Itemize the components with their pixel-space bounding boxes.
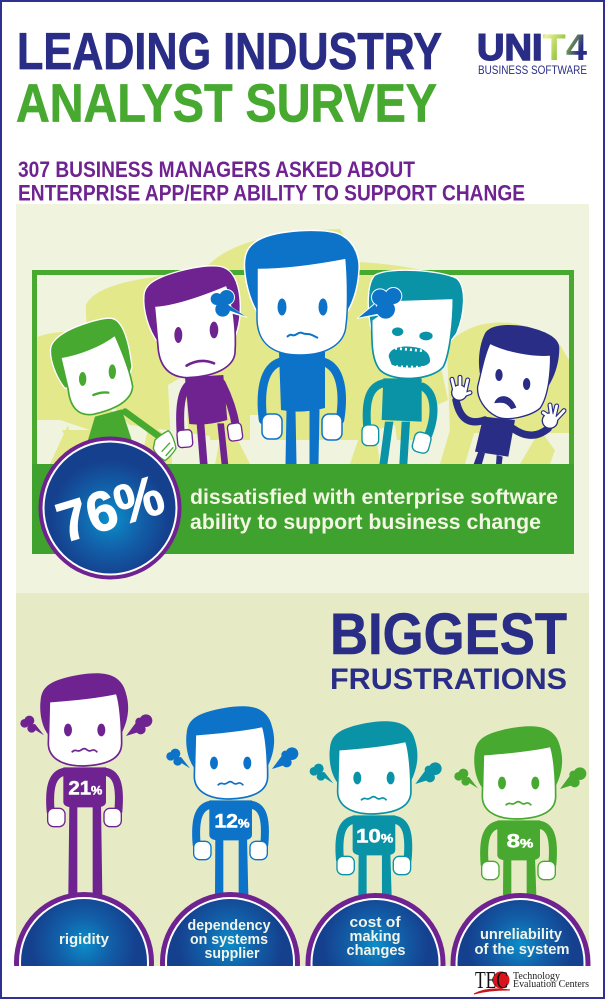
icon: anger puff (210, 289, 248, 318)
logo: Technology Evaluation Centers: TEC (475, 968, 508, 994)
icon: clawed hand left (451, 377, 470, 401)
background crowd silhouettes (37, 229, 569, 464)
dome: dependency (160, 892, 300, 966)
icon: steam right (272, 747, 298, 769)
character: purple (144, 266, 248, 465)
character: rigidity 21% (20, 673, 152, 895)
subtitle (18, 157, 525, 206)
icon: anger puff (356, 287, 402, 320)
dome: unreliability (450, 893, 590, 966)
logo: Unit4: UNIT4 (477, 27, 587, 68)
subtitle: 307 BUSINESS MANAGERS ASKED ABOUT (18, 157, 415, 182)
dome labels: of the system (474, 941, 570, 958)
subtitle: ENTERPRISE APP/ERP ABILITY TO SUPPORT CHANGE (18, 180, 525, 206)
stat: 12%: 12% (214, 812, 250, 833)
dome labels: supplier (204, 945, 260, 962)
caption text: ability to support business change (190, 511, 541, 534)
stat: 21%: 21% (68, 779, 103, 800)
icon: steam left (166, 749, 190, 768)
icon: steam left (454, 769, 478, 788)
dome: cost (306, 893, 446, 966)
character: cost 10% (310, 721, 442, 895)
logo: Technology Evaluation Centers (474, 968, 589, 994)
icon: clawed hand right (542, 405, 564, 429)
dome labels: changes (346, 942, 406, 959)
dome labels: cost of (350, 914, 402, 931)
character: unreliability 8% (454, 726, 586, 895)
stat: 8%: 8% (507, 832, 534, 853)
panel: dissatisfied (16, 204, 589, 593)
stat: 10%: 10% (356, 827, 394, 848)
dome: rigidity (14, 892, 154, 966)
icon: steam left (20, 716, 44, 735)
badge: 76% (38, 436, 182, 580)
caption text (190, 486, 558, 534)
heading (330, 602, 567, 696)
icon: steam right (560, 767, 586, 789)
character: green (51, 318, 176, 461)
heading: BIGGEST (330, 602, 567, 667)
caption text: dissatisfied with enterprise software (190, 486, 558, 509)
panel: biggest frustrations (14, 593, 590, 999)
dome labels: on systems (190, 931, 268, 948)
logo: Unit4: BUSINESS SOFTWARE (478, 65, 587, 77)
logo: Technology Evaluation Centers: Technology (513, 971, 561, 982)
character: blue (244, 230, 359, 464)
icon: steam left (310, 764, 333, 783)
title: ANALYST SURVEY (16, 74, 437, 134)
icon: steam right (126, 714, 152, 736)
dome labels: making (350, 928, 400, 945)
title: LEADING INDUSTRY (17, 23, 442, 81)
icon: steam right (415, 762, 442, 784)
dome labels: dependency (188, 917, 271, 934)
character: teal (356, 270, 464, 465)
dome labels: rigidity (59, 931, 110, 948)
domes row (14, 892, 590, 966)
chart frame (34, 272, 572, 472)
character: navy (451, 325, 564, 465)
dome labels (59, 914, 570, 962)
logo: Technology Evaluation Centers: Evaluation Centers (513, 979, 589, 990)
pale leg gaps (168, 375, 569, 464)
green caption bar (32, 464, 574, 554)
badge: 76%: 76% (49, 463, 171, 554)
heading: FRUSTRATIONS (330, 663, 567, 696)
dome labels: unreliability (480, 926, 563, 943)
character: dependency 12% (166, 706, 298, 895)
title (16, 23, 442, 134)
